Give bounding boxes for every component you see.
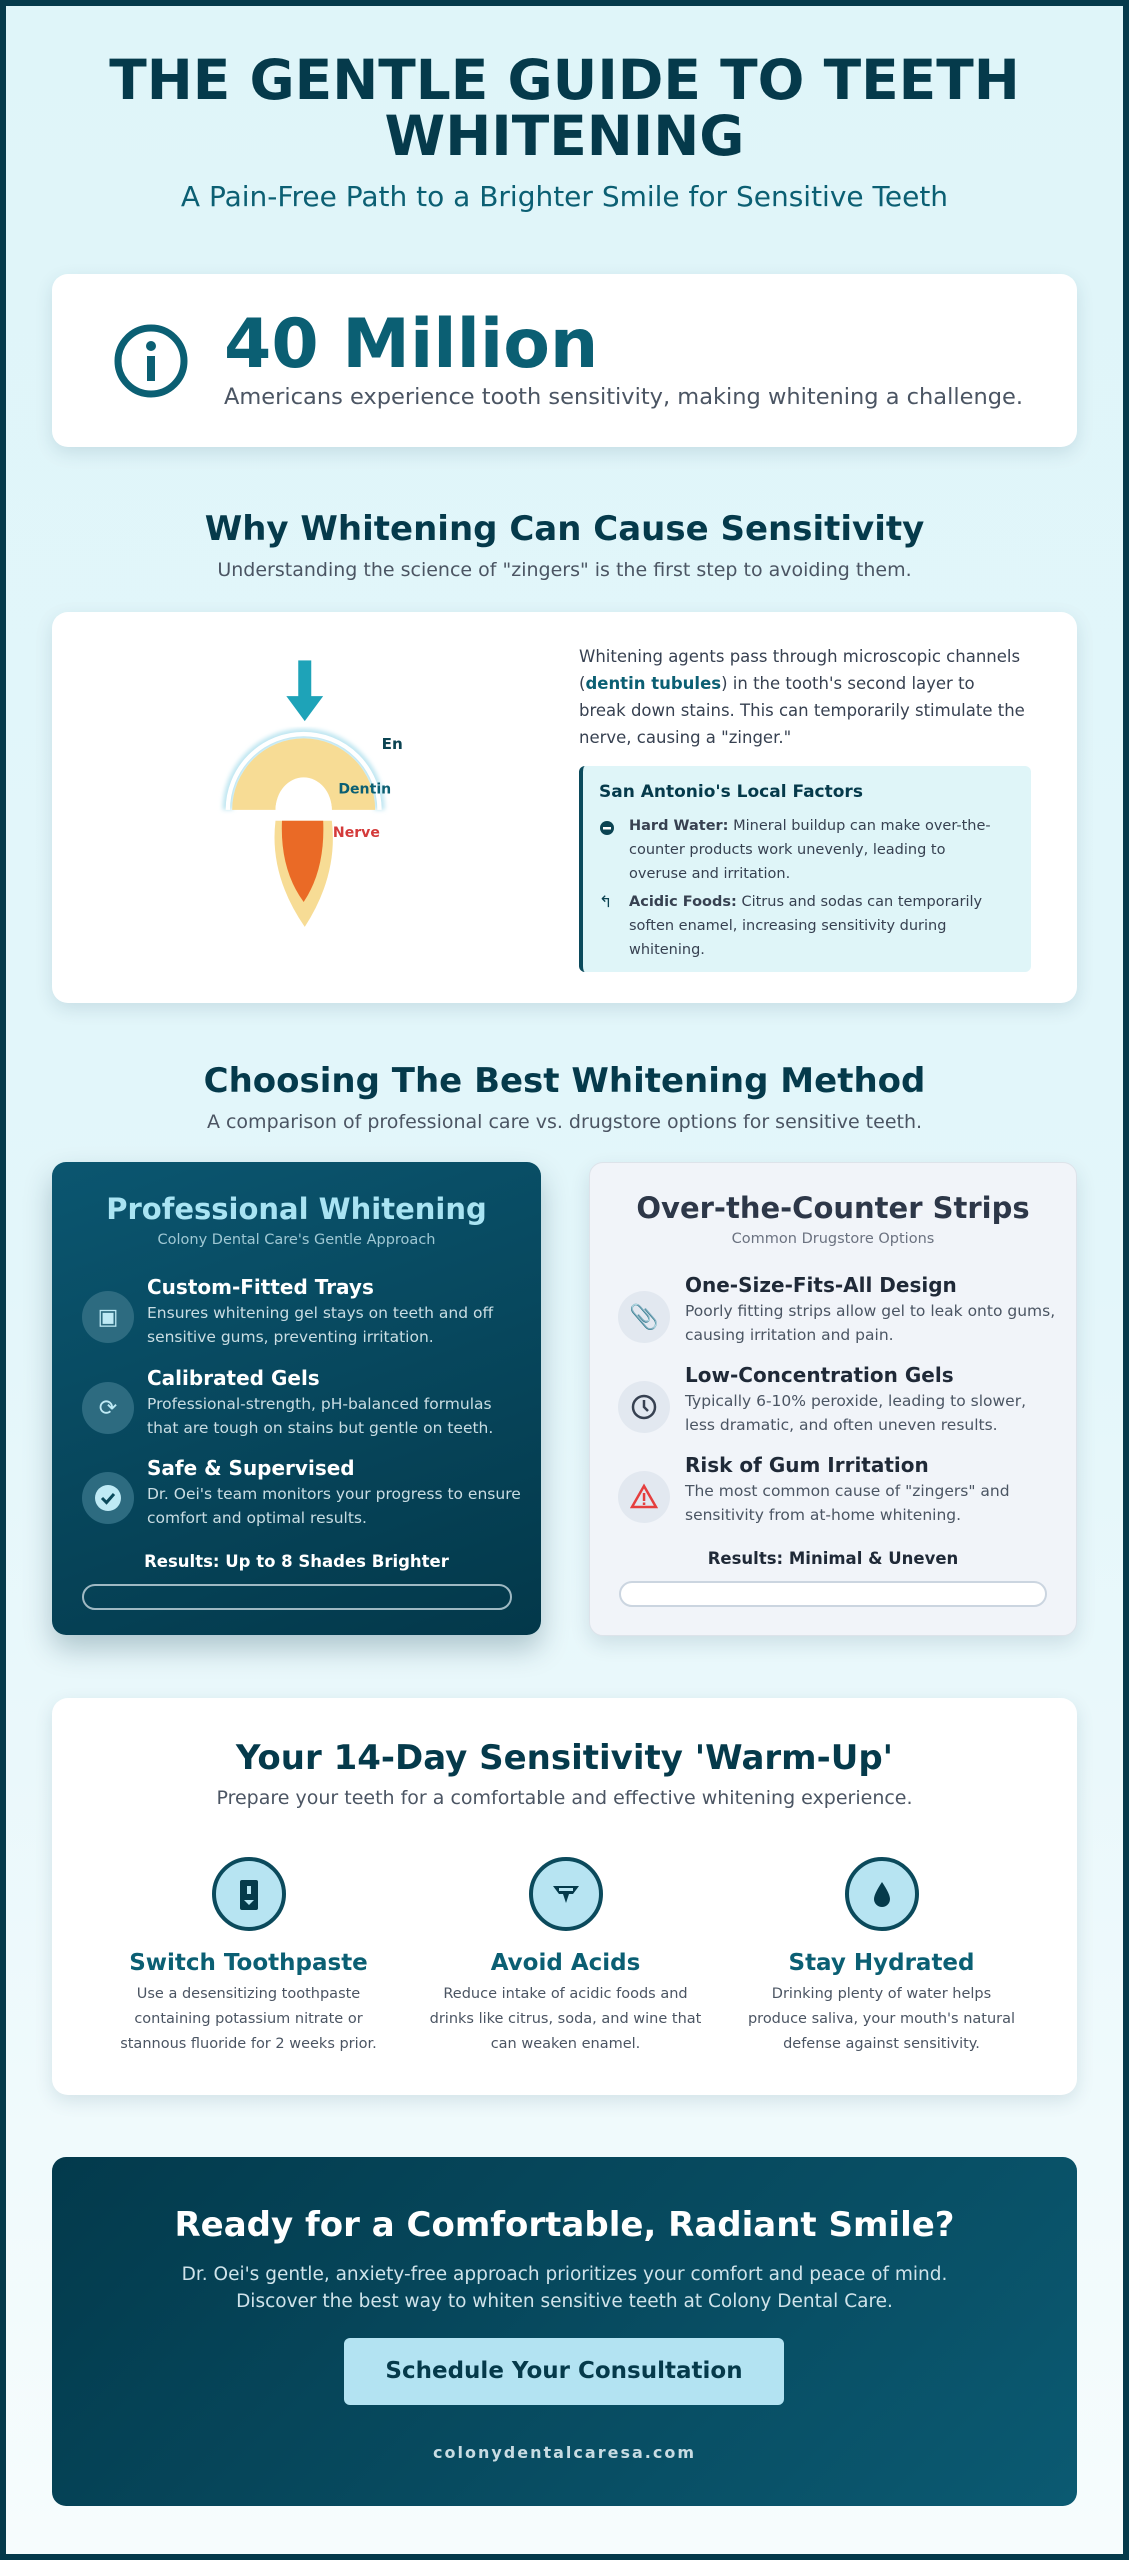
- panel: professional: [52, 1162, 541, 1635]
- panel: OTC: Poorly fitting strips allow gel to leak onto gums, causing irritation and pain.: [685, 1302, 1055, 1344]
- item: supervised: [82, 1456, 521, 1527]
- panel: OTC: The most common cause of "zingers" and sensitivity from at-home whitening.: [685, 1482, 1010, 1524]
- panel: OTC: 📎: [629, 1303, 659, 1331]
- icon: info: [114, 324, 188, 398]
- heading: choosing: Choosing The Best Whitening Method: [204, 1061, 925, 1101]
- label: nerve: Nerve: [333, 825, 380, 841]
- item: gum irritation: [618, 1453, 1010, 1524]
- panel: professional: ⟳: [99, 1396, 117, 1420]
- CTA heading: Ready for a Comfortable, Radiant Smile?: [174, 2205, 955, 2245]
- step: hydrate: Stay Hydrated: [788, 1950, 974, 1976]
- item: trays: [82, 1275, 494, 1346]
- callout: local factors: San Antonio's Local Factors: [599, 782, 863, 802]
- website: colonydentalcaresa.com: [433, 2443, 696, 2462]
- step: toothpaste: [120, 1857, 377, 2052]
- title: WHITENING: [385, 104, 744, 168]
- panel: professional: Safe & Supervised: [147, 1456, 355, 1480]
- step: avoid acids: [430, 1857, 701, 2052]
- label: dentin: Dentin: [338, 782, 391, 798]
- results bar: [82, 1584, 512, 1610]
- stat card: [52, 274, 1077, 447]
- factor: acidic foods: Acidic Foods: Citrus and sodas can temporarily soften enamel, increasing sensitivity during whitening.: [629, 894, 982, 958]
- item: gels: [82, 1366, 493, 1437]
- subtitle: A Pain-Free Path to a Brighter Smile for Sensitive Teeth: [181, 180, 948, 213]
- stat text: Americans experience tooth sensitivity, making whitening a challenge.: [224, 384, 1023, 410]
- step: toothpaste: Use a desensitizing toothpaste containing potassium nitrate or stannous fluoride for 2 weeks prior.: [120, 1986, 377, 2052]
- panel: OTC: One-Size-Fits-All Design: [685, 1273, 957, 1297]
- label: enamel: En: [382, 735, 403, 753]
- panel: call to action: [52, 2157, 1077, 2506]
- step: toothpaste: Switch Toothpaste: [129, 1950, 368, 1976]
- panel: OTC: Risk of Gum Irritation: [685, 1453, 929, 1477]
- results bar: [619, 1581, 1047, 1607]
- step: avoid acids: Reduce intake of acidic foods and drinks like citrus, soda, and wine that can weaken enamel.: [430, 1986, 701, 2052]
- panel: professional: Professional Whitening: [106, 1192, 487, 1226]
- results: Results: Minimal & Uneven: [708, 1549, 958, 1568]
- factor: acidic foods: ↰: [599, 892, 612, 911]
- explanation text: Whitening agents pass through microscopic channels (dentin tubules) in the tooth's second layer to break down stains. This can temporarily stimulate the nerve, causing a "zinger.": [579, 647, 1025, 747]
- panel: OTC: Low-Concentration Gels: [685, 1363, 954, 1387]
- tooth diagram: [220, 660, 403, 927]
- heading: Your 14-Day Sensitivity 'Warm-Up': [236, 1738, 893, 1778]
- CTA text: [182, 2264, 947, 2312]
- title: THE GENTLE GUIDE TO TEETH: [109, 48, 1020, 112]
- panel: professional: Colony Dental Care's Gentle Approach: [158, 1232, 435, 1248]
- panel: science: [52, 612, 1077, 1003]
- panel: professional: Calibrated Gels: [147, 1366, 320, 1390]
- panel: professional: Custom-Fitted Trays: [147, 1275, 374, 1299]
- step: hydrate: [748, 1857, 1015, 2052]
- subheading: Prepare your teeth for a comfortable and effective whitening experience.: [216, 1787, 913, 1809]
- results: Results: Up to 8 Shades Brighter: [144, 1552, 449, 1571]
- factor: hard water: Hard Water: Mineral buildup can make over-the-counter products work unevenly, leading to overuse and irritation.: [629, 818, 991, 882]
- step: avoid acids: Avoid Acids: [491, 1950, 640, 1976]
- button: [344, 2338, 784, 2405]
- panel: professional: Ensures whitening gel stays on teeth and off sensitive gums, preventing irritation.: [147, 1304, 493, 1346]
- subheading: A comparison of professional care vs. drugstore options for sensitive teeth.: [207, 1111, 922, 1133]
- panel: OTC: Typically 6-10% peroxide, leading to slower, less dramatic, and often uneven results.: [685, 1392, 1026, 1434]
- item: low concentration: [618, 1363, 1026, 1434]
- heading: why sensitivity: Why Whitening Can Cause Sensitivity: [205, 509, 924, 549]
- step: hydrate: Drinking plenty of water helps produce saliva, your mouth's natural defense against sensitivity.: [748, 1986, 1015, 2052]
- panel: OTC: Common Drugstore Options: [732, 1231, 934, 1247]
- callout: local factors: [579, 766, 1031, 972]
- title: [109, 48, 1020, 168]
- panel: professional: Dr. Oei's team monitors your progress to ensure comfort and optimal results.: [147, 1485, 521, 1527]
- panel: OTC: Over-the-Counter Strips: [636, 1191, 1030, 1225]
- panel: professional: ▣: [98, 1304, 118, 1330]
- subheading: Understanding the science of "zingers" is the first step to avoiding them.: [217, 559, 912, 581]
- CTA text: Discover the best way to whiten sensitive teeth at Colony Dental Care.: [236, 2291, 893, 2312]
- stat number: 40 Million: [224, 305, 598, 384]
- item: one size: [618, 1273, 1055, 1344]
- panel: warm-up: [52, 1698, 1077, 2095]
- CTA text: Dr. Oei's gentle, anxiety-free approach prioritizes your comfort and peace of mind.: [182, 2264, 947, 2285]
- button: Schedule Your Consultation: [385, 2358, 743, 2384]
- panel: OTC: [589, 1162, 1077, 1636]
- panel: professional: Professional-strength, pH-balanced formulas that are tough on stains but gentle on teeth.: [147, 1395, 493, 1437]
